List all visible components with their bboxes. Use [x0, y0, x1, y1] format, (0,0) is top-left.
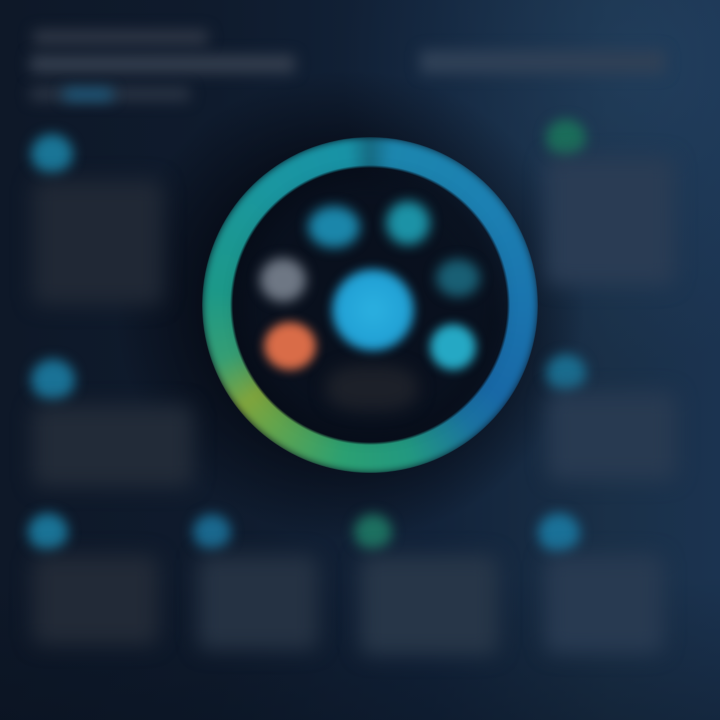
- panel: middle right: [539, 348, 674, 479]
- node: grey: [260, 258, 306, 302]
- text block: top right: [546, 157, 674, 285]
- inner disc: [244, 179, 496, 431]
- ring chart: [202, 137, 538, 473]
- node: teal outline: [436, 259, 480, 297]
- text block: bottom 1: [33, 555, 158, 645]
- panel: top left: [24, 126, 166, 306]
- text block: middle left: [33, 405, 193, 487]
- icon: top left: [31, 134, 73, 174]
- node: orange: [264, 322, 316, 370]
- panel: middle left: [24, 352, 196, 489]
- central diagram: [202, 137, 538, 473]
- node: top left: [308, 206, 360, 248]
- icon: bottom 4: [538, 513, 580, 553]
- text block: top left: [33, 180, 163, 305]
- text block: middle right: [548, 392, 676, 480]
- text block: bottom 4: [545, 555, 663, 653]
- icon: middle right: [546, 354, 586, 392]
- icon: top right: [546, 119, 586, 157]
- panel: bottom 2: [186, 507, 321, 654]
- panel: top right: [541, 114, 670, 288]
- text block: bottom 3: [360, 555, 498, 655]
- panel: bottom 3: [348, 508, 500, 659]
- icon: bottom 2: [193, 514, 231, 550]
- node: top right: [386, 201, 430, 245]
- centre label: [326, 365, 418, 411]
- icon: bottom 1: [28, 513, 68, 551]
- icon: middle left: [31, 359, 75, 401]
- text block: bottom 2: [198, 555, 318, 650]
- panel: bottom 1: [21, 506, 160, 648]
- centre node: [332, 269, 414, 351]
- title block: [26, 26, 298, 110]
- icon: bottom 3: [354, 514, 392, 550]
- node: right: [430, 324, 476, 370]
- subtitle block: [420, 50, 665, 74]
- panel: bottom 4: [532, 506, 662, 655]
